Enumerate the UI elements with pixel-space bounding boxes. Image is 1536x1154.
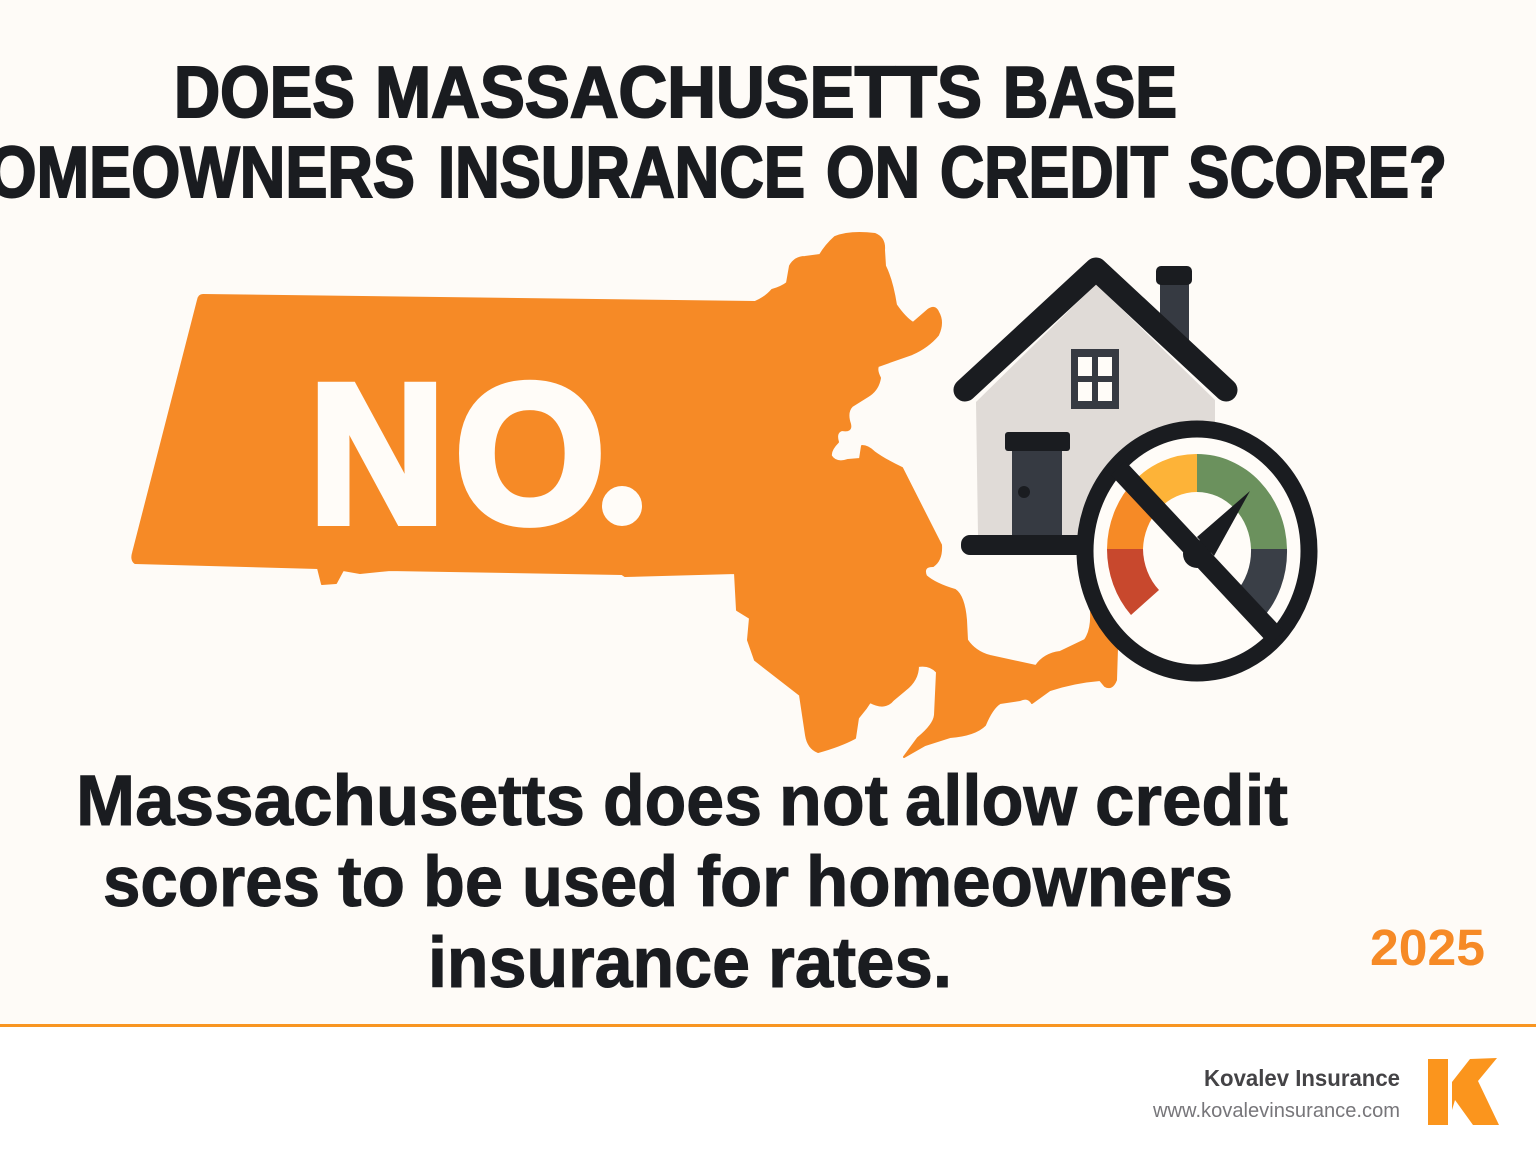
gauge: orange segment — [1107, 482, 1159, 549]
icon: house — [961, 266, 1226, 555]
subheading: be — [423, 843, 503, 922]
title — [0, 53, 1447, 213]
gauge: green segment — [1197, 454, 1287, 549]
subheading: not — [779, 762, 888, 841]
title: DOES — [174, 53, 355, 133]
subheading: homeowners — [806, 843, 1233, 922]
logo: K — [1428, 1058, 1499, 1125]
subheading: rates. — [768, 924, 952, 1003]
door — [1005, 432, 1070, 536]
subheading: insurance — [428, 924, 750, 1003]
answer: NO.: O — [455, 343, 605, 564]
window — [1071, 349, 1119, 409]
subheading: used — [522, 843, 678, 922]
title: BASE — [1003, 53, 1177, 133]
title: INSURANCE — [438, 133, 805, 213]
gauge needle — [1183, 491, 1250, 568]
gauge: dark segment — [1235, 549, 1287, 620]
title: ON — [826, 133, 920, 213]
gauge: red segment — [1107, 549, 1159, 615]
answer: NO.: N — [309, 343, 445, 564]
answer: NO. — [309, 343, 638, 564]
subheading: scores — [103, 843, 320, 922]
chimney — [1156, 266, 1192, 345]
subheading: to — [338, 843, 405, 922]
prohibition slash — [1118, 468, 1277, 638]
subheading — [76, 762, 1288, 1003]
website: www.kovalevinsurance.com — [1152, 1100, 1400, 1122]
title: CREDIT — [940, 133, 1168, 213]
subheading: does — [603, 762, 762, 841]
subheading: for — [697, 843, 789, 922]
subheading: Massachusetts — [76, 762, 585, 841]
subheading: credit — [1095, 762, 1288, 841]
icon: crossed-out credit score gauge — [1085, 429, 1309, 673]
roof — [965, 269, 1226, 390]
subheading: allow — [905, 762, 1078, 841]
company name: Kovalev Insurance — [1204, 1065, 1400, 1091]
title: SCORE? — [1188, 133, 1447, 213]
footer band — [0, 1024, 1536, 1154]
gauge: yellow segment — [1133, 454, 1197, 509]
year label: 2025 — [1370, 919, 1485, 976]
title: MASSACHUSETTS — [375, 53, 982, 133]
porch floor — [961, 535, 1091, 555]
map of Massachusetts — [132, 233, 1117, 757]
